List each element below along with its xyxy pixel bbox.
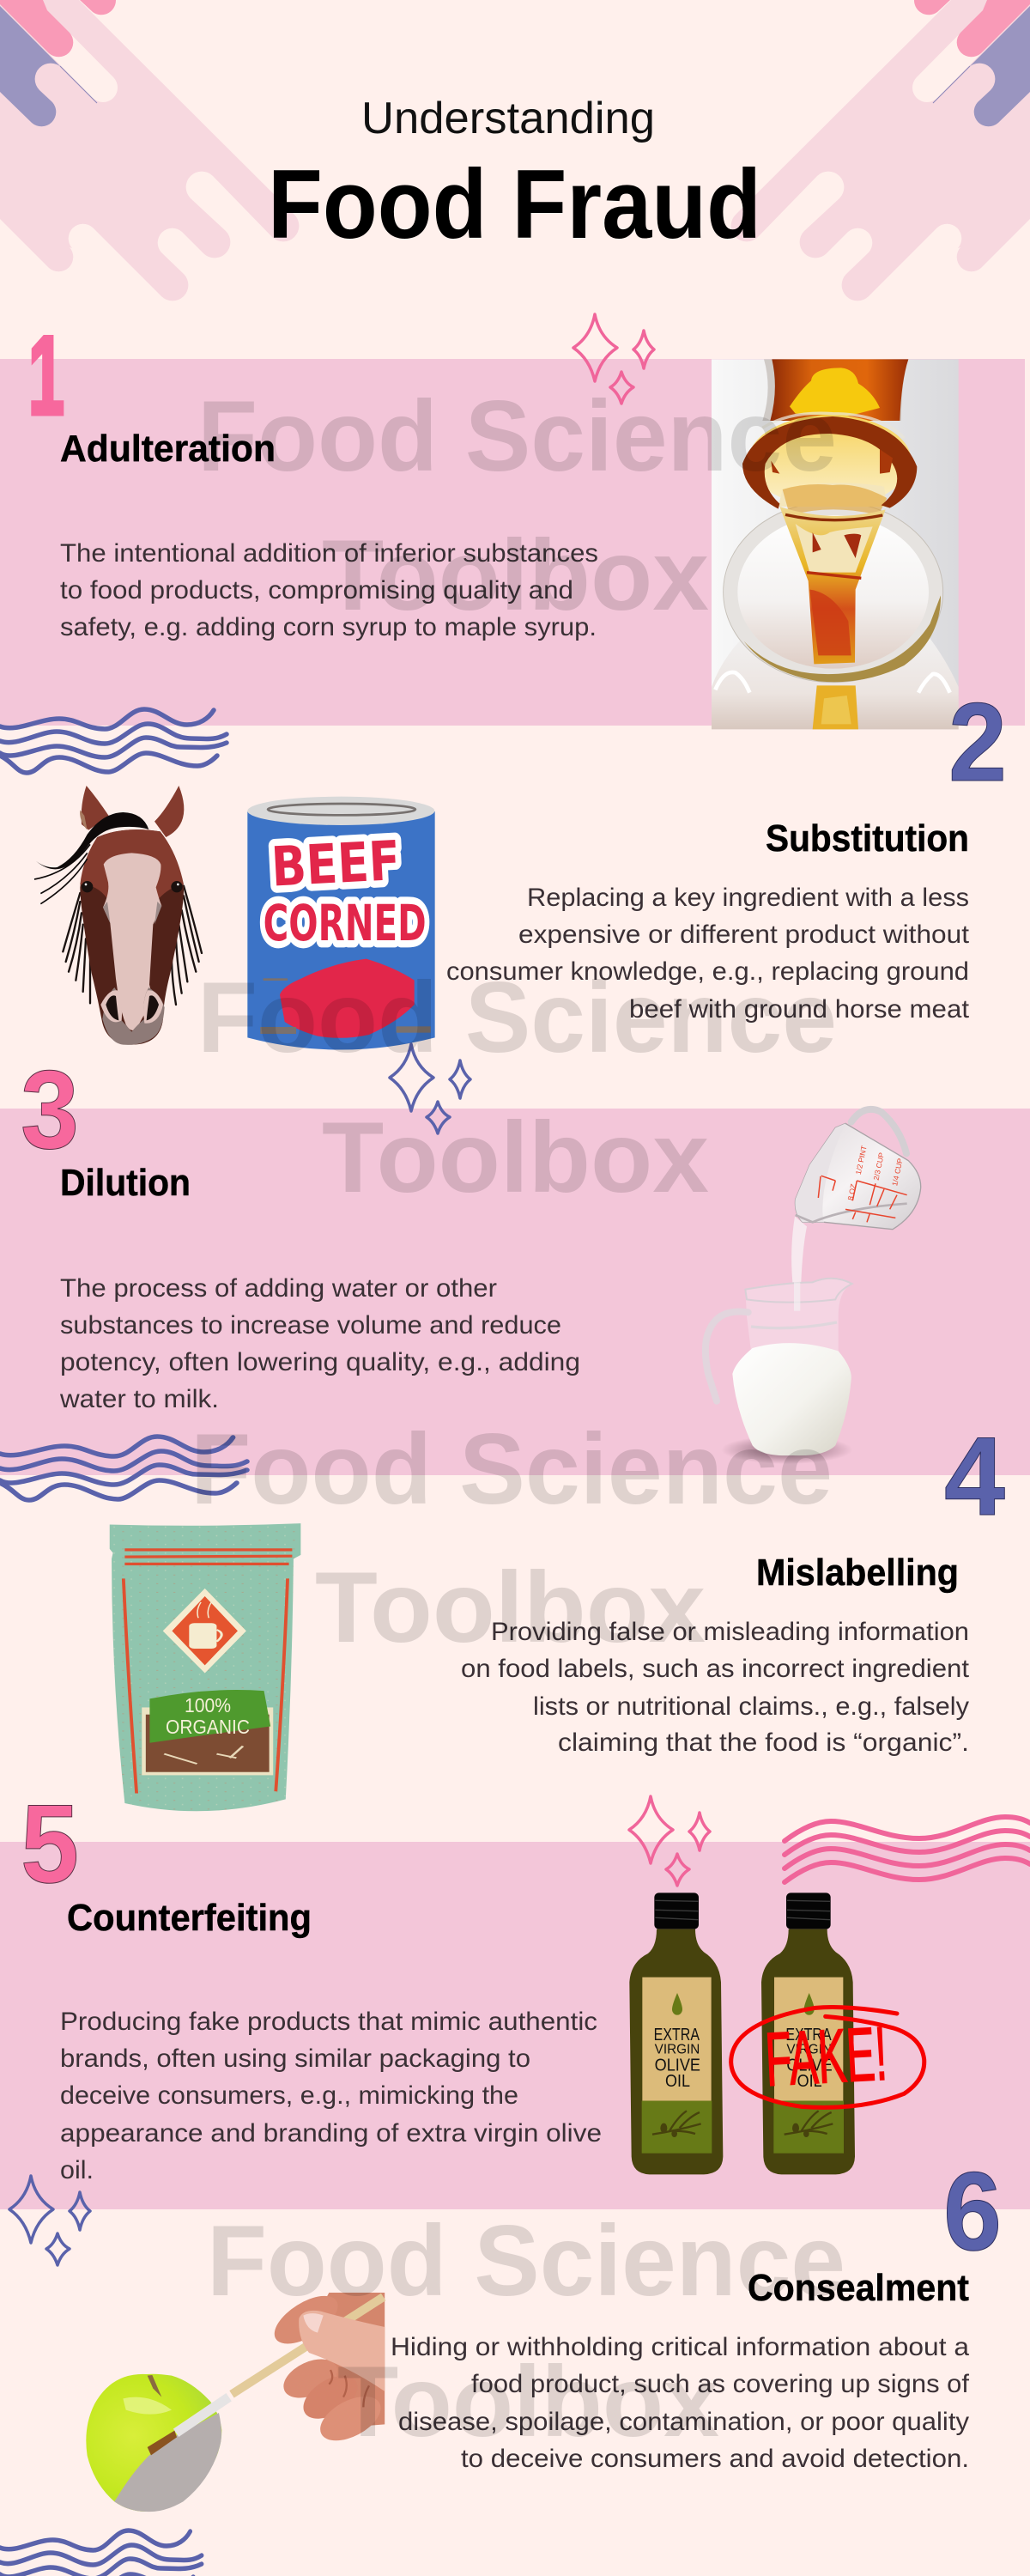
title line: Understanding: Understanding: [361, 94, 655, 143]
number 1: 1: [28, 313, 64, 438]
pouch label: 100% ORGANIC: 100%: [185, 1694, 231, 1716]
markings on measuring cup: 1/4 CUP: [890, 1157, 905, 1187]
number 5: 5: [21, 1781, 79, 1906]
body text: dilution: [59, 1274, 580, 1413]
icon: organic food pouch: [110, 1523, 300, 1811]
label text: BEEF: BEEF: [270, 829, 402, 899]
body text: counterfeiting: appearance and branding of extra virgin olive: [60, 2119, 602, 2148]
section 3: dilution: [21, 1044, 921, 1464]
watermark: section 2: Food Science: [197, 961, 837, 1073]
watermark: section 6: Food Science: [207, 2204, 845, 2317]
illustration: fake olive oil bottle: OLIVE: [786, 2057, 833, 2075]
body text: counterfeiting: [60, 2008, 602, 2184]
sparkles: pink: [573, 314, 654, 404]
markings on measuring cup: [846, 1145, 905, 1201]
label text: CORNED: CORNED: [264, 894, 427, 952]
body text: substitution: consumer knowledge, e.g., replacing ground: [446, 957, 969, 986]
watermark: section 1: Toolbox: [322, 519, 709, 631]
markings on measuring cup: 2/3 CUP: [872, 1151, 886, 1181]
watermark: section 6: Toolbox: [337, 2345, 719, 2458]
title line: Food Fraud: Food Fraud: [268, 150, 761, 259]
stamp: FAKE! circled in red: [731, 2007, 924, 2107]
body text: substitution: Replacing a key ingredient with a less: [527, 884, 969, 912]
body text: substitution: beef with ground horse meat: [629, 995, 970, 1024]
icon: horse head: [34, 786, 202, 1045]
illustration: fake olive oil bottle: EXTRA: [785, 2026, 832, 2044]
body text: adulteration: [60, 539, 598, 641]
section 2: substitution: [34, 679, 1007, 1049]
number 2: 2: [948, 679, 1007, 805]
body text: dilution: potency, often lowering quality, e.g., adding: [60, 1348, 580, 1376]
body text: mislabelling: Providing false or misleading information: [491, 1618, 969, 1646]
body text: dilution: substances to increase volume and reduce: [60, 1311, 561, 1340]
photo: pouring water into milk jug: [706, 1109, 921, 1464]
band: section 1 background: [0, 359, 1025, 726]
body text: substitution: expensive or different product without: [518, 920, 970, 949]
watermark: section 1: [197, 380, 837, 631]
photo: hand painting an apple grey: [86, 2287, 388, 2512]
body text: concealment: disease, spoilage, contamination, or poor quality: [398, 2408, 969, 2436]
stamp: FAKE! circled in red: FAKE!: [763, 2011, 889, 2102]
body text: counterfeiting: Producing fake products that mimic authentic: [60, 2008, 597, 2036]
sparkles: blue: [390, 1044, 470, 1133]
body text: adulteration: safety, e.g. adding corn syrup to maple syrup.: [60, 613, 597, 641]
sparkles: pink: [629, 1796, 710, 1886]
body text: concealment: Hiding or withholding critical information about a: [391, 2333, 969, 2361]
body text: counterfeiting: brands, often using similar packaging to: [60, 2044, 530, 2073]
number 3: 3: [21, 1047, 79, 1172]
body text: counterfeiting: deceive consumers, e.g., mimicking the: [60, 2081, 518, 2110]
body text: concealment: to deceive consumers and avoid detection.: [461, 2445, 969, 2473]
section 5: counterfeiting: [21, 1781, 1030, 2184]
heading: Dilution: Dilution: [60, 1162, 191, 1204]
watermark: section 2: [197, 961, 837, 1213]
watermark: section 6: [207, 2204, 845, 2458]
pouch label: 100% ORGANIC: [166, 1694, 250, 1738]
heading: Counterfeiting: Counterfeiting: [67, 1897, 312, 1939]
illustration: fake olive oil bottle: OIL: [797, 2072, 822, 2091]
watermark: section 4: Food Science: [191, 1413, 833, 1525]
body text: counterfeiting: oil.: [60, 2156, 94, 2184]
wave: blue under section 1: [0, 709, 227, 773]
decoration: top left corner shapes: [0, 0, 299, 301]
illustration: authentic olive oil bottle: EXTRA: [654, 2026, 700, 2044]
illustration: fake olive oil bottle: [761, 1893, 855, 2174]
decoration: top right corner shapes: [731, 0, 1030, 301]
number 4: 4: [944, 1413, 1005, 1539]
section 1: adulteration: [28, 313, 959, 729]
sparkles: blue: [9, 2176, 90, 2265]
icon: corned beef can: [247, 797, 435, 1049]
body text: dilution: The process of adding water or other: [60, 1274, 497, 1303]
photo: syrup pouring into jar: [712, 359, 959, 729]
body text: dilution: water to milk.: [59, 1385, 219, 1413]
watermark: section 4: Toolbox: [315, 1551, 706, 1663]
band: section 5 background: [0, 1842, 1030, 2209]
title: [268, 94, 761, 259]
illustration: authentic olive oil bottle: [629, 1893, 723, 2174]
watermark: section 1: Food Science: [197, 380, 837, 492]
heading: Consealment: Consealment: [748, 2267, 969, 2309]
body text: concealment: food product, such as covering up signs of: [471, 2370, 970, 2398]
section 6: concealment: [9, 2148, 1002, 2512]
section 4: mislabelling: [110, 1413, 1005, 1811]
band: section 3 background: [0, 1109, 1030, 1475]
body text: mislabelling: claiming that the food is “organic”.: [558, 1728, 969, 1757]
markings on measuring cup: 1/2 PINT: [854, 1145, 869, 1176]
illustration: authentic olive oil bottle: VIRGIN: [655, 2043, 700, 2057]
watermark: section 2: Toolbox: [322, 1101, 709, 1213]
heading: Mislabelling: Mislabelling: [756, 1552, 959, 1594]
body text: adulteration: The intentional addition of inferior substances: [60, 539, 598, 568]
body text: substitution: [446, 884, 970, 1024]
markings on measuring cup: 8 OZ: [846, 1182, 857, 1201]
body text: mislabelling: on food labels, such as incorrect ingredient: [461, 1655, 970, 1683]
watermark: section 4: [191, 1413, 833, 1663]
illustration: fake olive oil bottle: VIRGIN: [786, 2043, 832, 2057]
heading: Substitution: Substitution: [766, 817, 969, 860]
wave: blue under section 3: [0, 1437, 247, 1500]
heading: Adulteration: Adulteration: [60, 428, 276, 470]
body text: mislabelling: lists or nutritional claims., e.g., falsely: [533, 1692, 969, 1721]
body text: adulteration: to food products, compromising quality and: [60, 576, 573, 605]
illustration: authentic olive oil bottle: OIL: [665, 2072, 690, 2091]
wave: blue bottom left: [0, 2530, 202, 2576]
body text: concealment: [391, 2333, 970, 2473]
illustration: authentic olive oil bottle: OLIVE: [655, 2057, 700, 2075]
number 6: 6: [943, 2148, 1002, 2274]
pouch label: 100% ORGANIC: ORGANIC: [166, 1716, 250, 1738]
body text: mislabelling: [461, 1618, 970, 1757]
wave: pink: [785, 1817, 1030, 1882]
